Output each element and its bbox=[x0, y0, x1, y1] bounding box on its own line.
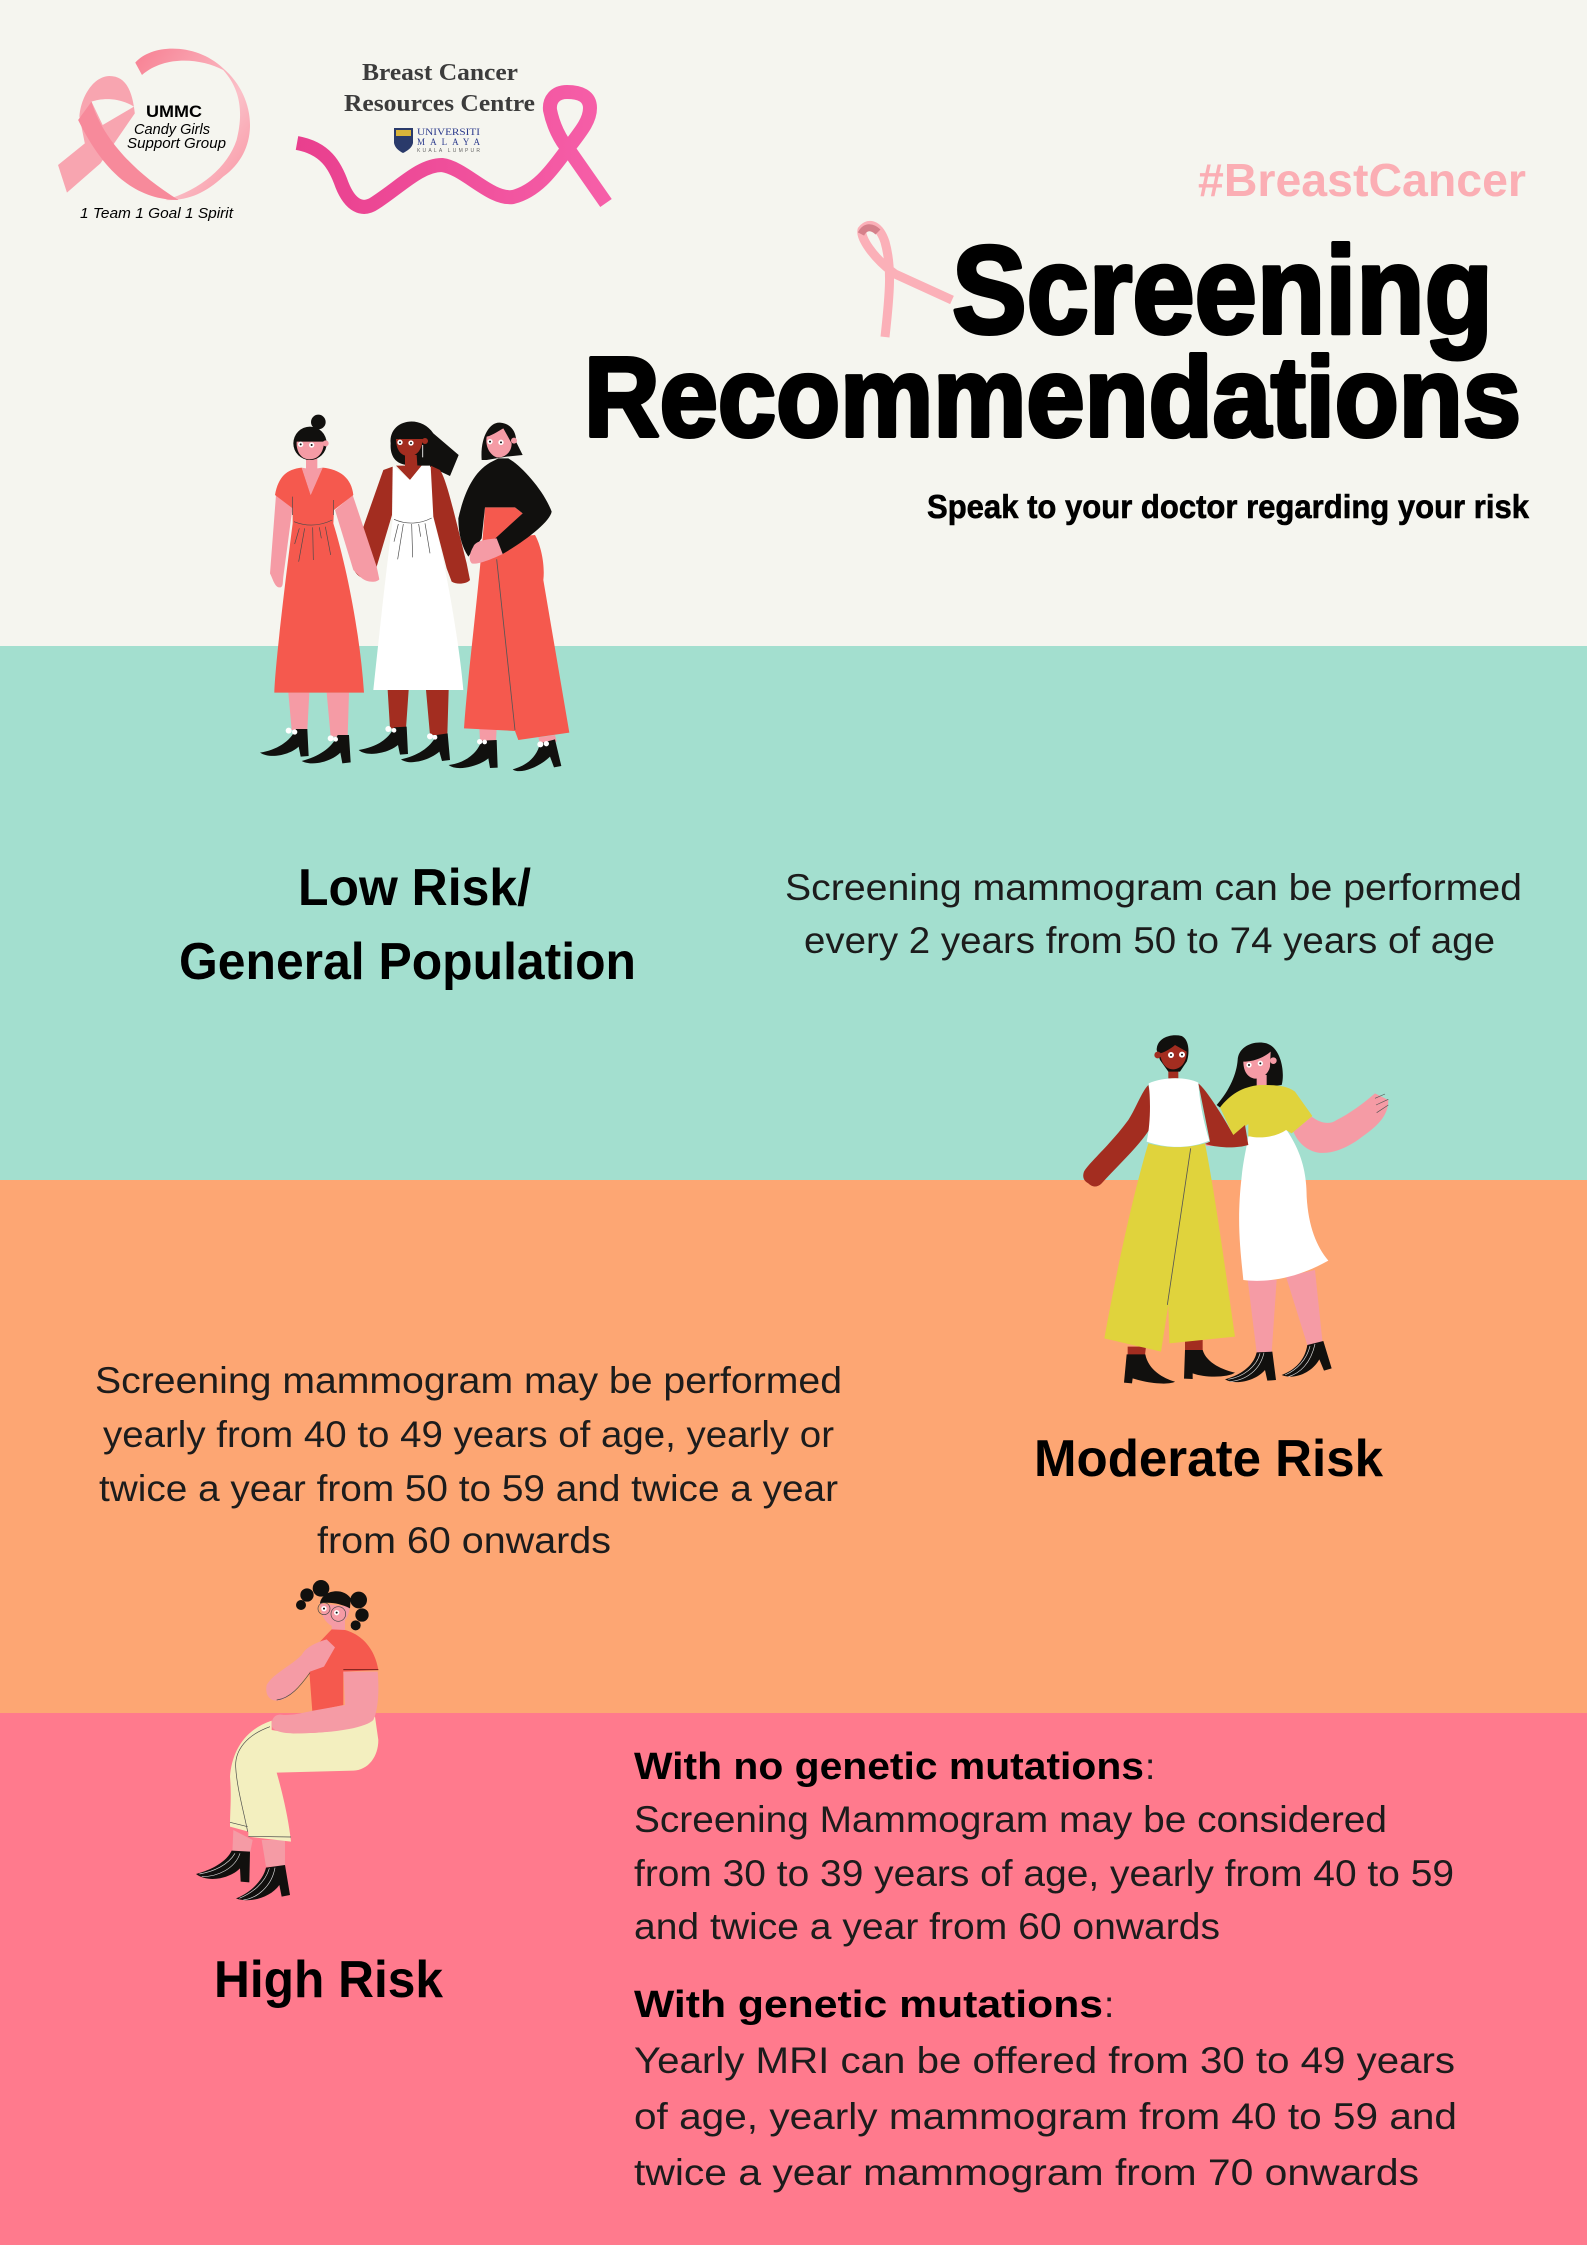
text: moderate risk recommendation: twice a year from 50 to 59 and twice a year bbox=[99, 1468, 838, 1509]
heading: low risk: Low Risk/ bbox=[298, 859, 531, 917]
logo: Breast Cancer Resources Centre: KUALA LUMPUR bbox=[417, 148, 480, 154]
text: no genetic mutations: : bbox=[1145, 1746, 1155, 1787]
text: moderate risk recommendation: yearly from 40 to 49 years of age, yearly or bbox=[103, 1414, 834, 1455]
right woman bbox=[449, 423, 569, 771]
hashtag: #BreastCancer bbox=[1198, 154, 1526, 206]
text: moderate risk recommendation bbox=[95, 1360, 842, 1561]
logo: Breast Cancer Resources Centre bbox=[297, 60, 606, 207]
logo: Breast Cancer Resources Centre: Resources Centre bbox=[344, 91, 535, 117]
text: no genetic mutations: Screening Mammogram may be considered bbox=[634, 1799, 1387, 1840]
icon: title ribbon bbox=[861, 225, 952, 337]
illustration: two women embracing bbox=[1083, 1035, 1388, 1384]
text: with genetic mutations: twice a year mammogram from 70 onwards bbox=[634, 2152, 1419, 2193]
text: low risk recommendation: Screening mammogram can be performed bbox=[785, 867, 1522, 908]
text: with genetic mutations bbox=[634, 1984, 1457, 2193]
title: Recommendations bbox=[584, 334, 1521, 460]
logo: UMMC Candy Girls Support Group: UMMC bbox=[146, 102, 202, 121]
logo: Breast Cancer Resources Centre: Breast Cancer bbox=[362, 60, 518, 86]
panel: moderate risk bbox=[0, 1180, 1587, 1713]
woman in yellow top and white skirt bbox=[1205, 1042, 1388, 1382]
title bbox=[584, 222, 1521, 460]
left woman bbox=[260, 415, 379, 763]
text: with genetic mutations: With genetic mutations bbox=[634, 1984, 1103, 2026]
text: no genetic mutations: With no genetic mutations bbox=[634, 1746, 1144, 1788]
heading: moderate risk: Moderate Risk bbox=[1034, 1430, 1383, 1488]
subtitle: Speak to your doctor regarding your risk bbox=[927, 488, 1530, 525]
logo: UMMC Candy Girls Support Group bbox=[58, 49, 250, 222]
logo: UMMC Candy Girls Support Group: Support Group bbox=[127, 135, 226, 152]
text: low risk recommendation: every 2 years from 50 to 74 years of age bbox=[804, 920, 1495, 961]
text: with genetic mutations: : bbox=[1104, 1984, 1114, 2025]
logo: Breast Cancer Resources Centre: MALAYA bbox=[417, 137, 480, 147]
logo: UMMC Candy Girls Support Group: 1 Team 1 Goal 1 Spirit bbox=[80, 205, 234, 222]
panel: low risk bbox=[0, 646, 1587, 1180]
text: no genetic mutations: and twice a year from 60 onwards bbox=[634, 1906, 1220, 1947]
text: with genetic mutations: of age, yearly mammogram from 40 to 59 and bbox=[634, 2096, 1457, 2137]
text: no genetic mutations: from 30 to 39 years of age, yearly from 40 to 59 bbox=[634, 1853, 1454, 1894]
heading: low risk bbox=[179, 859, 636, 991]
logo: UMMC Candy Girls Support Group: Candy Girls bbox=[134, 121, 210, 138]
woman in white top and yellow trousers bbox=[1083, 1035, 1248, 1384]
text: moderate risk recommendation: from 60 onwards bbox=[317, 1520, 611, 1561]
middle woman bbox=[352, 421, 470, 762]
panel: header background bbox=[0, 0, 1587, 646]
title: Screening bbox=[952, 222, 1493, 360]
illustration: three women holding hands bbox=[260, 415, 569, 771]
logo: Breast Cancer Resources Centre: UNIVERSITI bbox=[417, 127, 480, 137]
text: no genetic mutations bbox=[634, 1746, 1454, 1947]
heading: high risk: High Risk bbox=[214, 1951, 443, 2009]
text: moderate risk recommendation: Screening mammogram may be performed bbox=[95, 1360, 842, 1401]
heading: low risk: General Population bbox=[179, 933, 636, 991]
text: with genetic mutations: Yearly MRI can be offered from 30 to 49 years bbox=[634, 2040, 1455, 2081]
text: low risk recommendation bbox=[785, 867, 1522, 961]
illustration: seated woman with glasses bbox=[196, 1580, 378, 1900]
panel: high risk bbox=[0, 1713, 1587, 2245]
